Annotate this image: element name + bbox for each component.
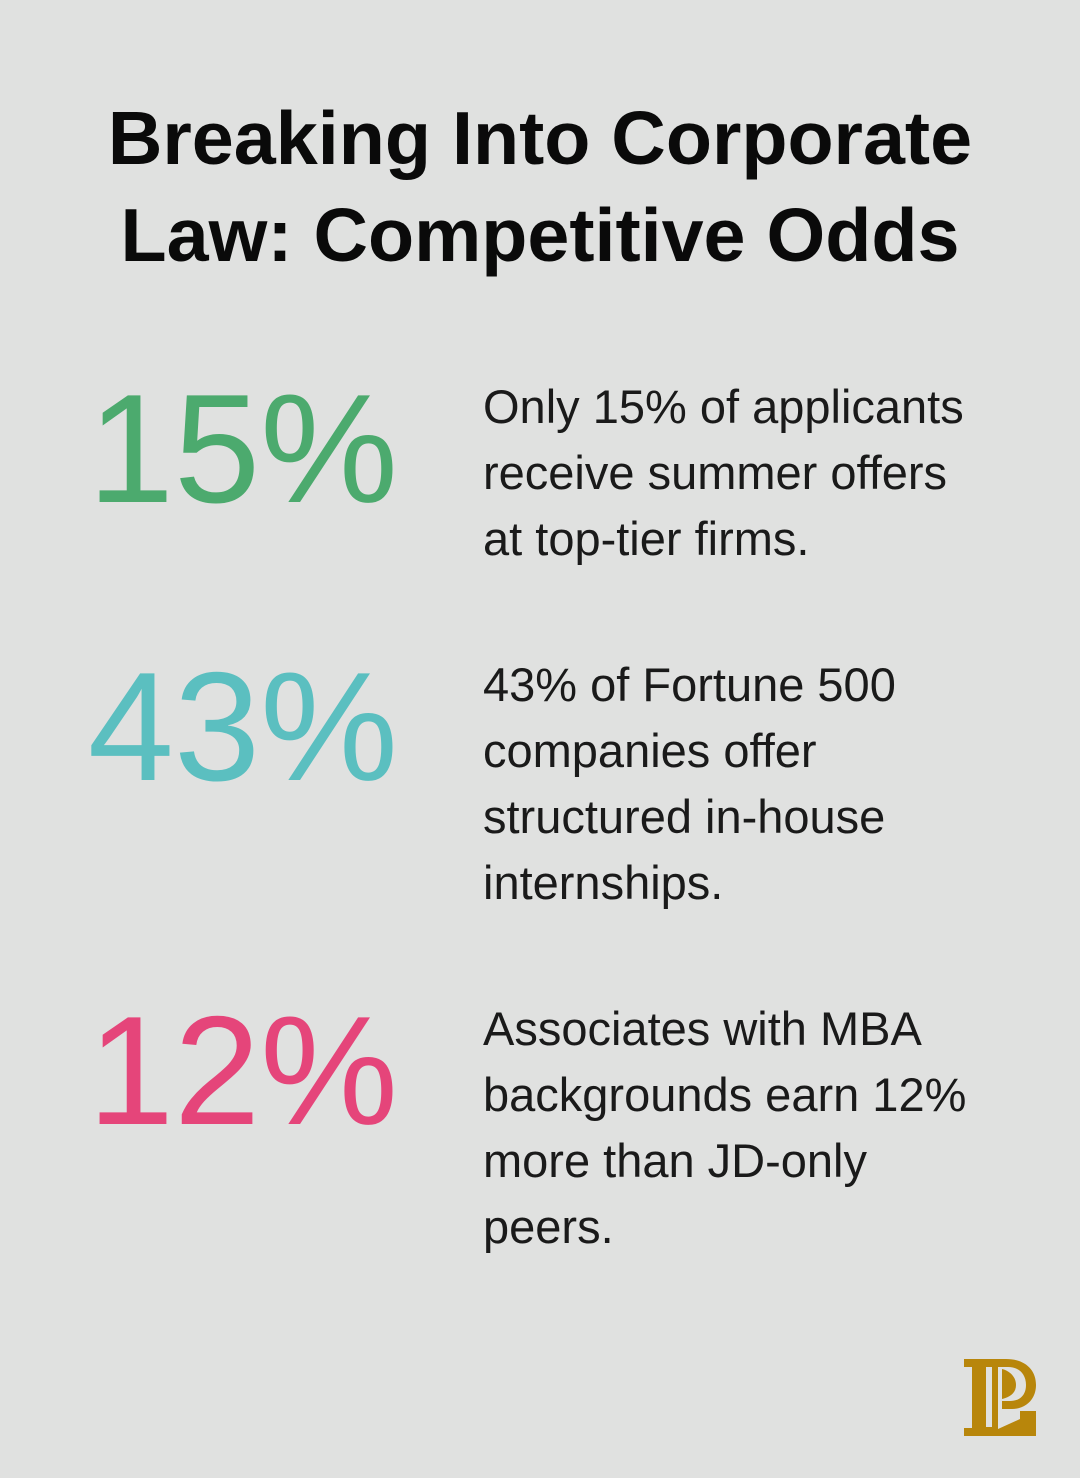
stat 1 text: at top-tier firms. (483, 512, 809, 565)
stat 1 text: Only 15% of applicants (483, 380, 964, 433)
icon: logo (964, 1359, 1036, 1436)
stat 1 text (483, 380, 964, 565)
title (108, 96, 972, 277)
stat 1 number: 15% (88, 362, 398, 535)
stat 2 text: internships. (483, 856, 723, 909)
stat 3 text: Associates with MBA (483, 1002, 922, 1055)
stat 2 text: 43% of Fortune 500 (483, 658, 896, 711)
stat 3 text (483, 1002, 966, 1253)
stat 3 text: peers. (483, 1200, 614, 1253)
stat 1 text: receive summer offers (483, 446, 947, 499)
stat 3 text: more than JD-only (483, 1134, 867, 1187)
stat 3 number: 12% (88, 984, 398, 1157)
stat 2 number: 43% (88, 640, 398, 813)
title: Law: Competitive Odds (120, 193, 959, 277)
stat 2 text: structured in-house (483, 790, 885, 843)
stat 2 text: companies offer (483, 724, 817, 777)
stat 2 text (483, 658, 896, 909)
stat 3 text: backgrounds earn 12% (483, 1068, 966, 1121)
title: Breaking Into Corporate (108, 96, 972, 180)
